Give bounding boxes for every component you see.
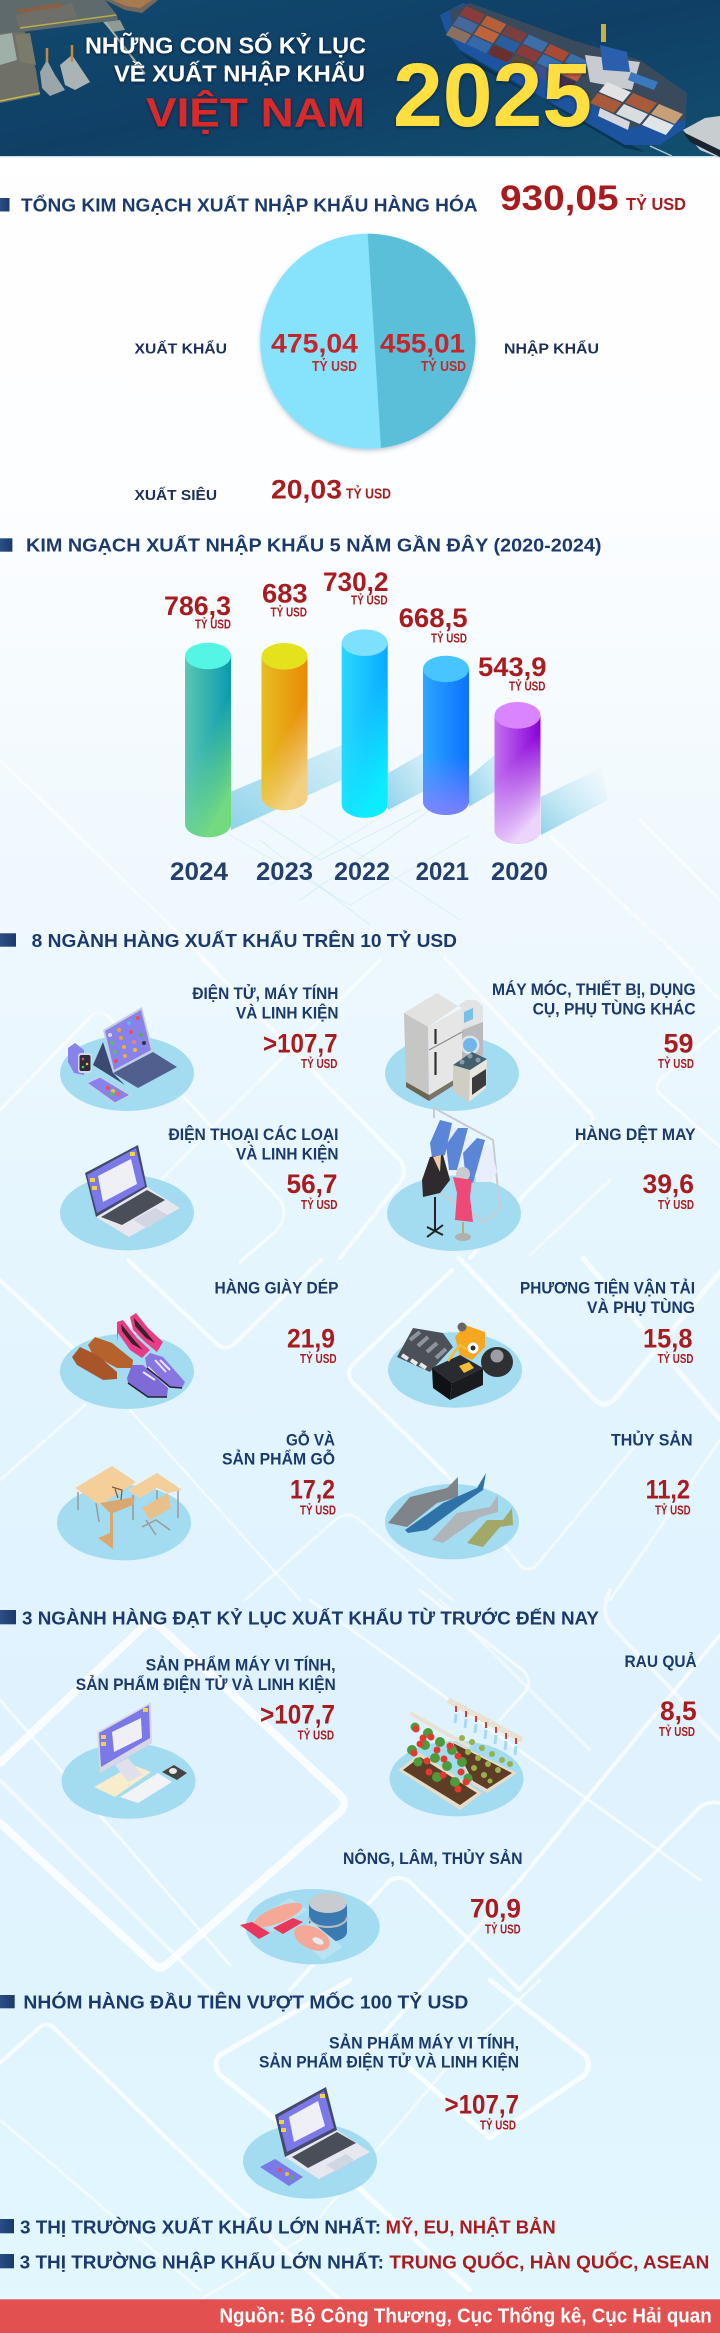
value (658, 1028, 694, 1071)
value: 56,7 (286, 1169, 338, 1199)
sector: wood (57, 1430, 336, 1560)
value: TỶ USD (300, 1351, 337, 1366)
panel: five year trade (0, 535, 608, 886)
value 2021: TỶ USD (431, 631, 467, 646)
label (259, 2033, 519, 2072)
label: GỖ VÀ (286, 1430, 335, 1449)
icon: wooden desks (75, 1466, 182, 1549)
label: MÁY MÓC, THIẾT BỊ, DỤNG (492, 980, 696, 999)
panel: top import markets: 3 THỊ TRƯỜNG NHẬP KHẨU LỚN NHẤT: (20, 2251, 384, 2272)
value: 59 (664, 1028, 693, 1058)
year axis labels: 2024 (170, 858, 228, 886)
icon: appliances (404, 993, 487, 1102)
record: vegetables and fruit (390, 1652, 697, 1816)
import unit: TỶ USD (421, 358, 466, 375)
label: VÀ PHỤ TÙNG (587, 1298, 695, 1317)
value (286, 1169, 338, 1212)
label: ĐIỆN TỬ, MÁY TÍNH (192, 984, 338, 1003)
value 2023: 683 (262, 579, 308, 609)
sector: machinery (385, 980, 696, 1111)
import label: NHẬP KHẨU (504, 339, 599, 357)
label: NÔNG, LÂM, THỦY SẢN (343, 1849, 523, 1868)
value (643, 1323, 693, 1366)
value (470, 1893, 521, 1936)
value 2022: 730,2 (323, 567, 388, 597)
icon: engine, oil, battery and tyre (397, 1322, 513, 1400)
label: PHƯƠNG TIỆN VẬN TẢI (520, 1279, 695, 1298)
bar 2024 (185, 643, 231, 837)
title (85, 30, 592, 146)
icon: vegetable beds (398, 1700, 522, 1810)
panel: top export markets (0, 2216, 556, 2237)
value: 39,6 (642, 1169, 694, 1199)
value 2022: TỶ USD (351, 593, 388, 608)
title: 2025 (393, 46, 592, 146)
year axis labels: 2021 (416, 858, 469, 886)
value 2024: TỶ USD (195, 617, 231, 632)
panel: top export markets: 3 THỊ TRƯỜNG XUẤT KHẨU LỚN NHẤT: (20, 2216, 381, 2237)
value (646, 1475, 691, 1518)
year axis labels: 2022 (334, 858, 390, 886)
panel: top import markets: TRUNG QUỐC, HÀN QUỐC, ASEAN (389, 2251, 709, 2272)
sector: phones (60, 1125, 338, 1250)
value (290, 1475, 336, 1518)
icon: fish (388, 1473, 513, 1547)
panel: total trade (0, 179, 686, 504)
value: 21,9 (287, 1323, 335, 1353)
label: VÀ LINH KIỆN (236, 1003, 338, 1022)
value: TỶ USD (298, 1727, 334, 1742)
label: RAU QUẢ (624, 1652, 697, 1671)
value: >107,7 (444, 2089, 519, 2119)
value: 15,8 (643, 1323, 692, 1353)
label (76, 1656, 336, 1694)
value (260, 1699, 335, 1742)
surplus unit: TỶ USD (346, 485, 391, 502)
value 2024: 786,3 (164, 591, 231, 621)
bar 2020 (494, 702, 540, 844)
header banner (0, 0, 720, 158)
value: TỶ USD (300, 1503, 336, 1518)
bar 2021 (423, 656, 469, 815)
label: CỤ, PHỤ TÙNG KHÁC (533, 999, 696, 1018)
value: TỶ USD (301, 1197, 338, 1212)
record: agriculture, forestry, fisheries (240, 1849, 523, 1964)
panel: top import markets (0, 2251, 709, 2272)
surplus label: XUẤT SIÊU (134, 486, 217, 504)
label: ĐIỆN THOẠI CÁC LOẠI (168, 1125, 338, 1144)
icon: port on the left (0, 0, 158, 103)
icon: desktop computer (94, 1702, 187, 1803)
heading: eight sectors: 8 NGÀNH HÀNG XUẤT KHẨU TRÊN 10 TỶ USD (32, 930, 457, 951)
label (192, 984, 338, 1022)
value (263, 1028, 338, 1071)
value: 17,2 (290, 1475, 335, 1505)
heading: record sectors: 3 NGÀNH HÀNG ĐẠT KỶ LỤC XUẤT KHẨU TỪ TRƯỚC ĐẾN NAY (22, 1607, 599, 1628)
title: VIỆT NAM (146, 90, 365, 136)
export value: 475,04 (271, 328, 358, 358)
year axis labels (170, 858, 548, 886)
export label: XUẤT KHẨU (134, 339, 227, 357)
value: >107,7 (260, 1699, 335, 1729)
label: THỦY SẢN (611, 1430, 692, 1449)
value 2021 (399, 603, 468, 646)
icon: container ship (440, 3, 720, 158)
value (642, 1169, 694, 1212)
value: 8,5 (660, 1696, 697, 1726)
sector: textiles (387, 1107, 696, 1251)
label: HÀNG DỆT MAY (575, 1125, 696, 1144)
label: SẢN PHẨM MÁY VI TÍNH, (329, 2033, 519, 2052)
value: >107,7 (263, 1028, 338, 1058)
value 2023: TỶ USD (270, 605, 307, 620)
label: SẢN PHẨM ĐIỆN TỬ VÀ LINH KIỆN (259, 2053, 519, 2072)
value: TỶ USD (658, 1197, 694, 1212)
bar 2023 (262, 643, 308, 810)
label (168, 1125, 338, 1163)
export unit: TỶ USD (312, 358, 357, 375)
year axis labels: 2023 (256, 858, 313, 886)
icon: laptop and phone (260, 2087, 370, 2186)
sector: footwear (60, 1279, 338, 1409)
bar 2022 (342, 629, 388, 818)
footer: source bar (0, 2299, 720, 2333)
icon: clothes rack (422, 1107, 500, 1241)
heading: first group: NHÓM HÀNG ĐẦU TIÊN VƯỢT MỐC 100 TỶ USD (23, 1991, 468, 2012)
label: VÀ LINH KIỆN (236, 1144, 338, 1163)
surplus value: 20,03 (271, 474, 342, 504)
title: NHỮNG CON SỐ KỶ LỤC (85, 30, 366, 58)
value: TỶ USD (658, 1056, 694, 1071)
title: VỀ XUẤT NHẬP KHẨU (114, 60, 365, 87)
import value: 455,01 (380, 328, 465, 358)
total value: 930,05 (500, 179, 618, 218)
value: TỶ USD (659, 1724, 695, 1739)
panel: eight export sectors (0, 930, 696, 1560)
record: computers (62, 1656, 336, 1819)
label: SẢN PHẨM GỖ (222, 1450, 335, 1469)
label (492, 980, 696, 1018)
heading: total trade: TỔNG KIM NGẠCH XUẤT NHẬP KHẨU HÀNG HÓA (21, 194, 478, 215)
icon: tablet, watch and phone (68, 1007, 177, 1103)
icon: shoes (72, 1313, 185, 1397)
icon: packaged seafood (240, 1893, 347, 1960)
total unit: TỶ USD (626, 193, 686, 214)
circle with laptop and phone (243, 2087, 377, 2199)
icon: laptop (85, 1145, 180, 1237)
bar shadows (231, 745, 608, 835)
value: TỶ USD (485, 1921, 521, 1936)
value (444, 2089, 519, 2133)
label: SẢN PHẨM MÁY VI TÍNH, (146, 1656, 336, 1675)
value: 70,9 (470, 1893, 521, 1923)
sector: vehicles (388, 1279, 695, 1408)
label (520, 1279, 695, 1317)
pie chart (260, 234, 475, 449)
year axis labels: 2020 (491, 858, 548, 886)
value: TỶ USD (655, 1503, 691, 1518)
sector: electronics (60, 984, 338, 1111)
value 2021: 668,5 (399, 603, 468, 633)
panel: record sectors (0, 1607, 697, 1964)
value: 11,2 (646, 1475, 690, 1505)
value: TỶ USD (301, 1056, 338, 1071)
value (287, 1323, 337, 1366)
label: HÀNG GIÀY DÉP (214, 1279, 338, 1298)
value 2020: 543,9 (478, 652, 546, 682)
value (659, 1696, 697, 1739)
value: TỶ USD (658, 1351, 693, 1366)
label (222, 1430, 335, 1469)
panel: top export markets: MỸ, EU, NHẬT BẢN (386, 2216, 556, 2237)
panel: first group over 100 billion (0, 1991, 519, 2199)
sector: seafood (385, 1430, 692, 1559)
heading: five years: KIM NGẠCH XUẤT NHẬP KHẨU 5 NĂM GẦN ĐÂY (2020-2024) (26, 535, 602, 556)
value 2020: TỶ USD (509, 678, 546, 693)
value: TỶ USD (480, 2118, 516, 2133)
label: SẢN PHẨM ĐIỆN TỬ VÀ LINH KIỆN (76, 1675, 336, 1694)
